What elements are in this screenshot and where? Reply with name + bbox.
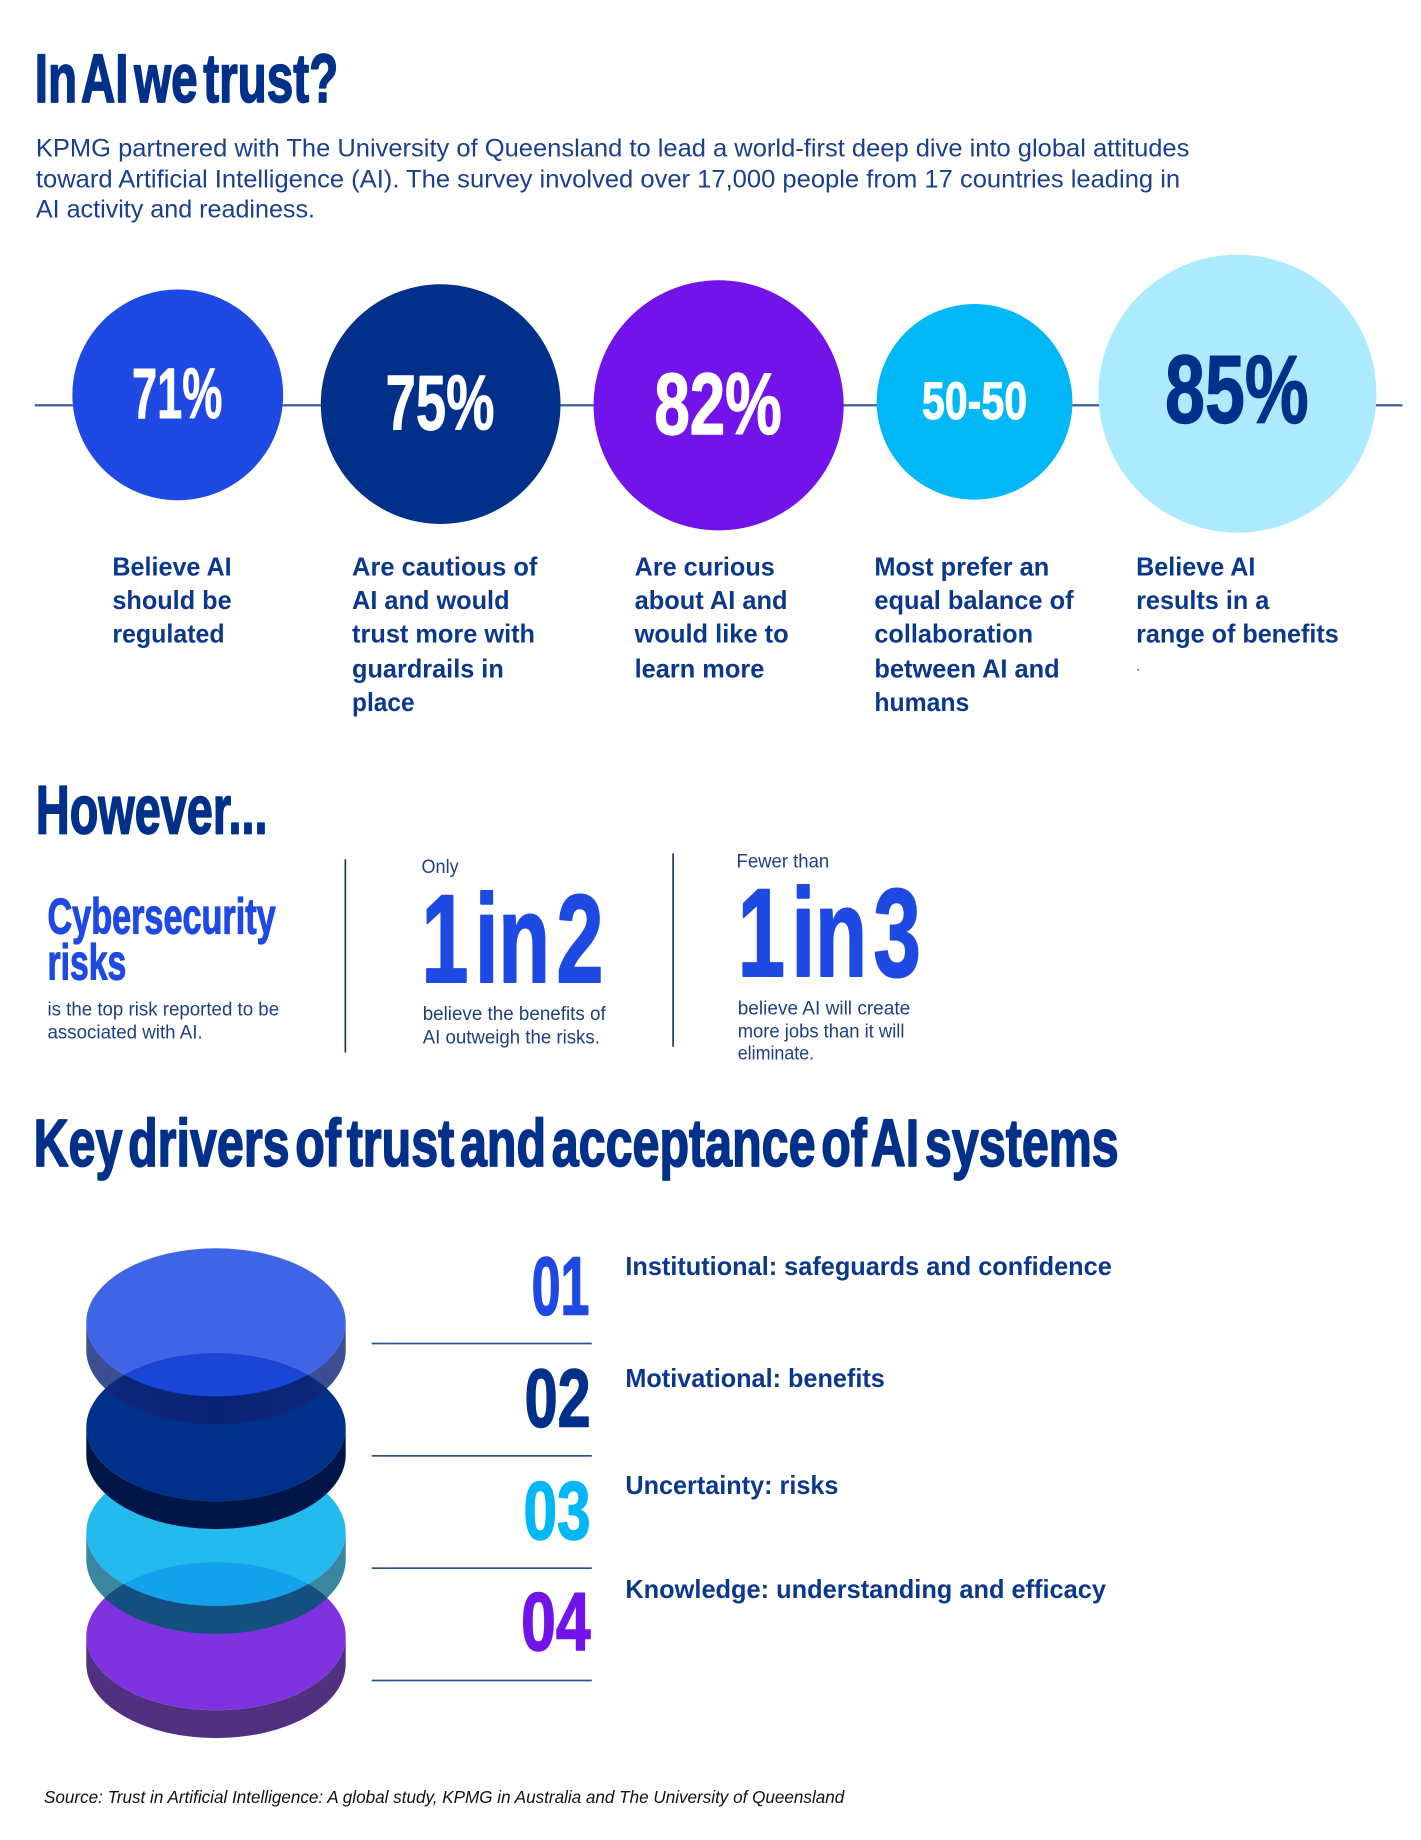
callout: 1 in 3: believe AI will create [738,998,910,1019]
stat label: curious: learn more [635,653,764,683]
stat circle: 85%: 85% [1165,337,1309,444]
stat label: collaboration: humans [874,687,969,717]
stacked discs illustration [86,1248,346,1738]
stat label: collaboration: collaboration [874,619,1033,649]
stat label: regulated [112,552,232,649]
disc 4: purple [86,1562,346,1738]
callout: 1 in 3: eliminate. [738,1044,814,1065]
callout: cybersecurity risks [47,888,279,1044]
stat label: curious: about AI and [635,585,788,615]
callout: 1 in 2: believe the benefits of [423,1004,606,1025]
driver 04: 04 [521,1577,591,1668]
callout: cybersecurity risks: Cybersecurity [47,888,276,944]
stat circle: 71%: 71% [132,354,222,434]
stat circle: 75%: 75% [386,361,495,447]
driver 04 [372,1574,1106,1681]
stat label: regulated: regulated [112,619,225,649]
stat label: collaboration: Most prefer an [874,552,1049,582]
stat circle: 50-50 [877,304,1072,500]
intro paragraph: KPMG partnered with The University of Queensland to lead a world-first deep dive into global attitudes [36,134,1189,162]
driver 04: Knowledge: understanding and efficacy [625,1574,1106,1604]
intro paragraph [36,134,1189,224]
stat label: cautious: AI and would [352,585,510,615]
stat label: benefits: range of benefits [1136,619,1339,649]
stat label: benefits: Believe AI [1136,552,1255,582]
callout: cybersecurity risks: associated with AI. [47,1023,203,1044]
stat label: benefits: results in a [1136,585,1270,615]
stat label: cautious: guardrails in [352,653,504,683]
stat label: curious: Are curious [635,552,775,582]
stat circle: 75% [321,284,561,524]
driver 03: Uncertainty: risks [625,1470,838,1500]
intro paragraph: toward Artificial Intelligence (AI). The survey involved over 17,000 people from 17 countries leading in [36,166,1180,194]
stat label: cautious [352,552,538,717]
callout: 1 in 2: 1 in 2 [422,869,603,1009]
stat label: collaboration: between AI and [874,653,1060,683]
divider [345,859,346,1053]
stat label: collaboration [874,552,1074,717]
callout: 1 in 3: more jobs than it will [738,1022,904,1043]
callout: 1 in 2: AI outweigh the risks. [423,1027,600,1048]
callout: 1 in 3: Fewer than [737,851,829,872]
driver 02: 02 [525,1354,591,1445]
stat circle: 50-50: 50-50 [922,372,1027,431]
stat label: curious: would like to [634,619,789,649]
heading: However: However... [36,773,268,849]
stat label: curious [634,552,789,683]
title: In AI we trust? [35,41,338,117]
callout: 1 in 3 [737,851,921,1065]
stat label: regulated: should be [112,585,232,615]
stat label: collaboration: equal balance of [874,585,1074,615]
stat circle: 85% [1098,255,1376,533]
driver 03 [372,1466,838,1569]
stat circle: 82% [594,280,844,530]
stat circle: 82%: 82% [654,356,782,453]
driver 01: Institutional: safeguards and confidence [625,1251,1112,1281]
disc 3: cyan [86,1480,346,1634]
callout: 1 in 2 [422,857,606,1048]
stat circle: 71% [72,289,283,500]
divider [672,853,674,1047]
driver 02 [372,1354,885,1457]
stat label: cautious: trust more with [352,619,535,649]
disc 2: navy [86,1353,346,1529]
callout: 1 in 2: Only [422,857,459,878]
callout: cybersecurity risks: risks [47,935,126,991]
stat label: cautious: place [352,687,415,717]
driver 01 [372,1241,1112,1344]
stat label: regulated: Believe AI [112,552,232,582]
driver 03: 03 [523,1466,591,1557]
stat label: benefits: . [1136,657,1140,673]
intro paragraph: AI activity and readiness. [36,196,315,224]
disc 1: blue [86,1248,346,1424]
source note: Source: Trust in Artificial Intelligence: A global study, KPMG in Australia and The University of Queensland [44,1787,846,1807]
driver 01: 01 [532,1241,589,1332]
callout: cybersecurity risks: is the top risk reported to be [47,1000,279,1021]
timeline connector line [35,404,1402,406]
callout: 1 in 3: 1 in 3 [738,863,921,1003]
stat label: cautious: Are cautious of [352,552,538,582]
driver 02: Motivational: benefits [625,1363,885,1393]
stat label: benefits [1136,552,1339,673]
